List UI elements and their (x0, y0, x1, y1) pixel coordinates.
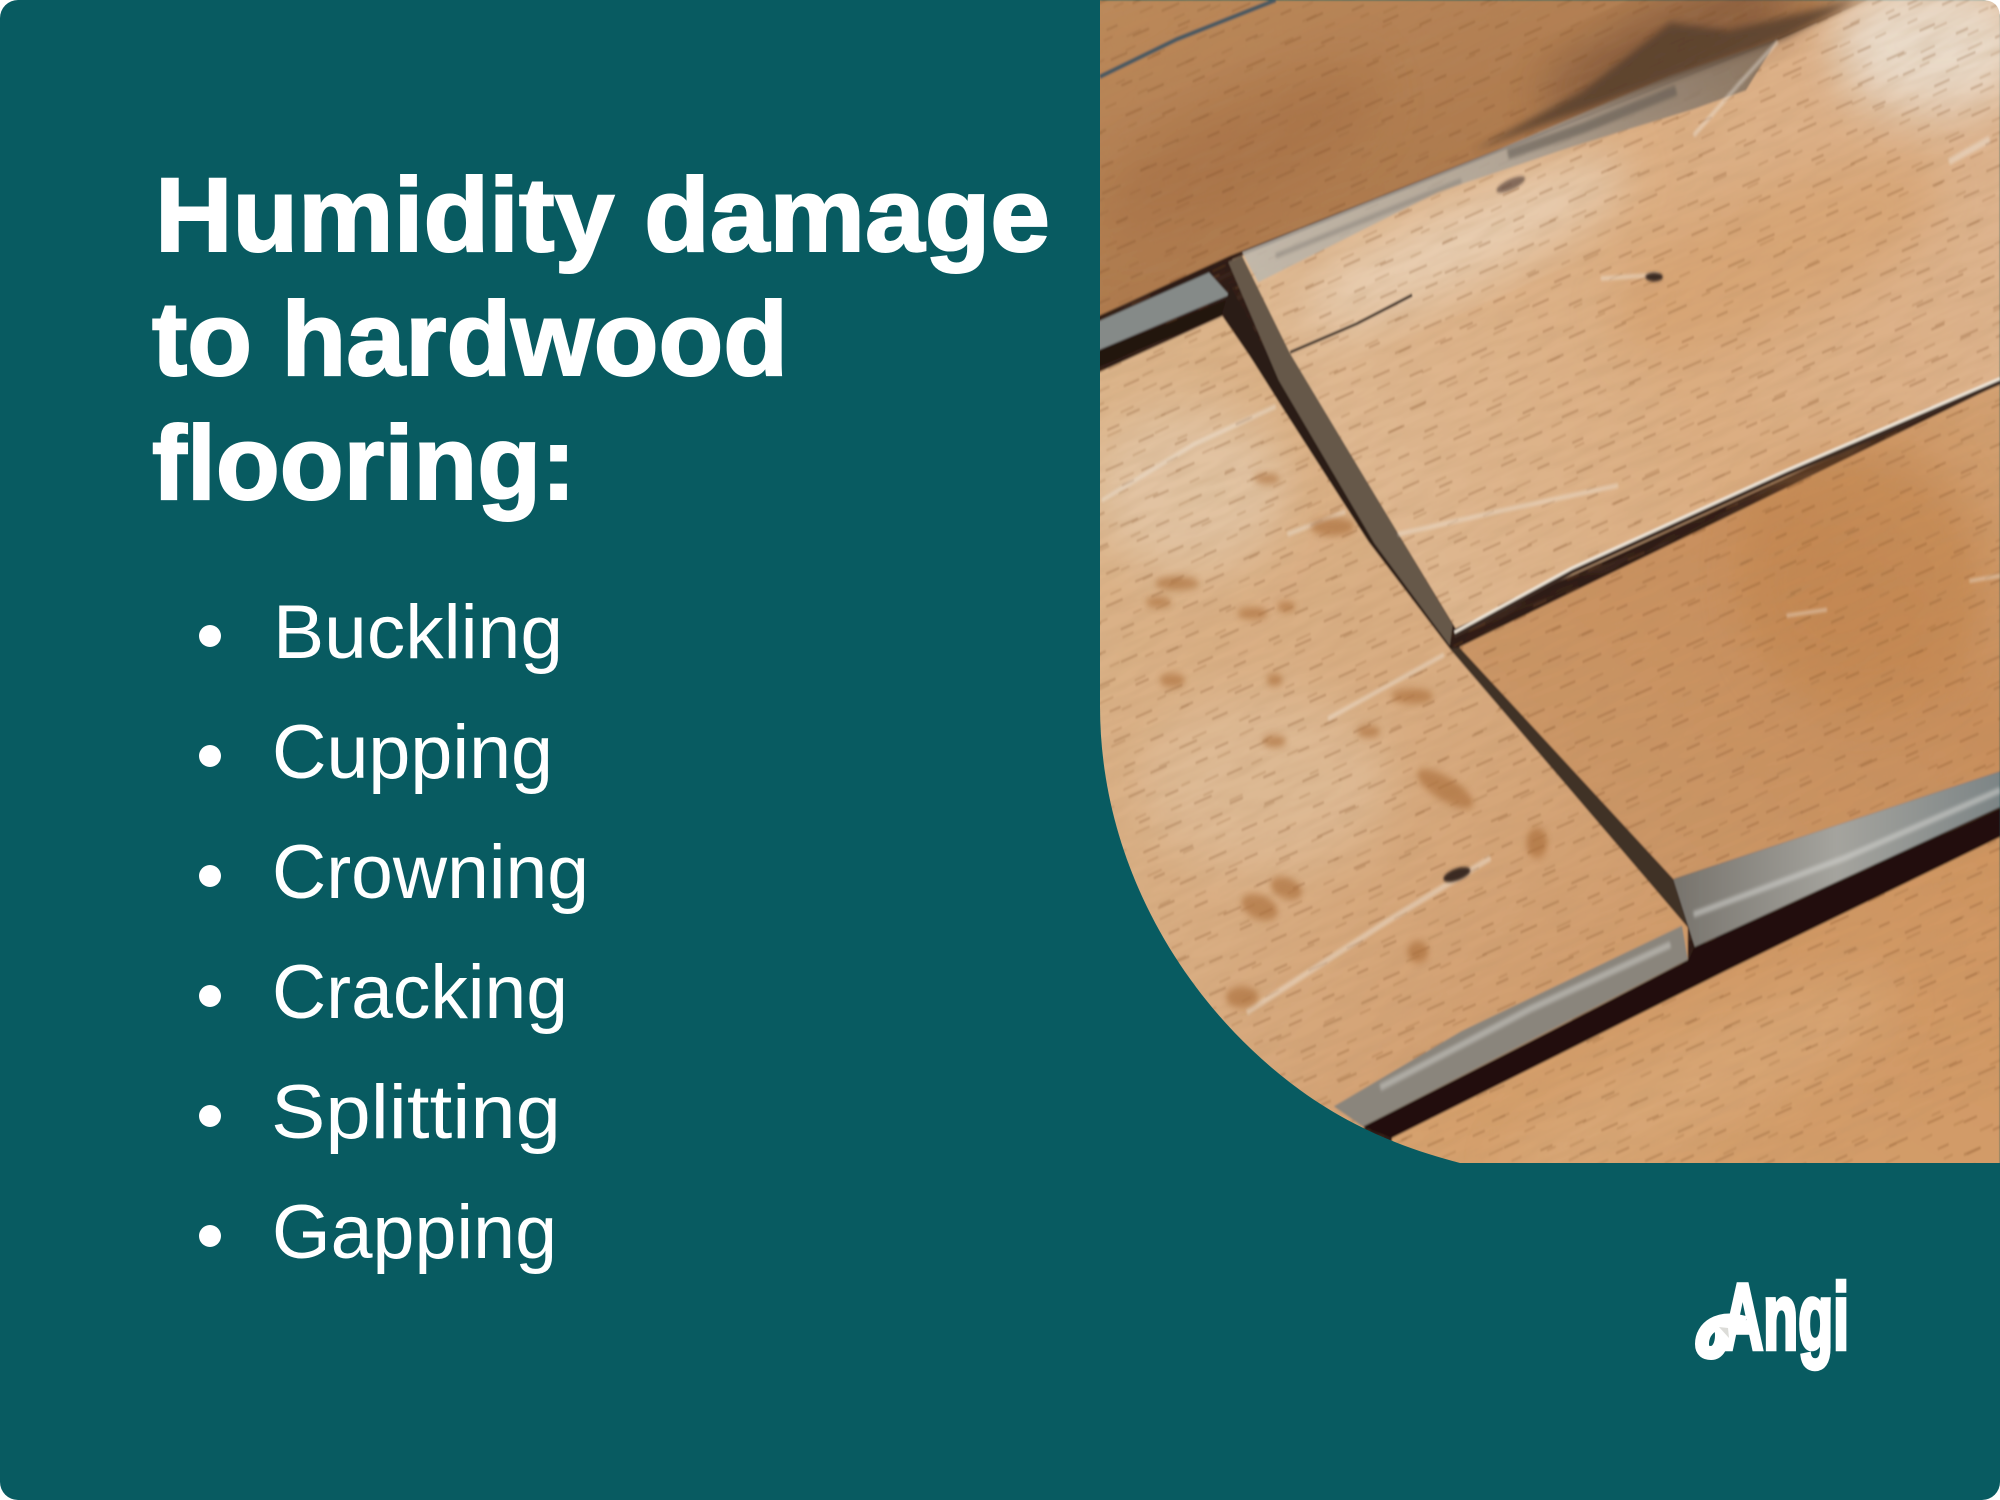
dark wear at top seam (1473, 0, 1856, 151)
plank: right middle board (1459, 384, 2000, 879)
list item: Cupping: Cupping (272, 710, 553, 795)
list item: Cracking: Cracking (272, 950, 568, 1035)
upper board worn edge (1242, 39, 1778, 282)
grey lifted strip right (1673, 771, 2000, 947)
dark knots (1442, 173, 1663, 885)
white scratches (1102, 41, 2000, 1012)
title: to hardwood (152, 281, 788, 398)
logo: Angi (1702, 1264, 1849, 1369)
top seam crack (1100, 0, 1276, 77)
title: flooring: (152, 405, 576, 522)
list of damage types (199, 590, 589, 1275)
plank: bottom right board (1392, 837, 2000, 1174)
base dark gap colour (1090, 0, 2000, 1174)
list item: Crowning: Crowning (272, 830, 589, 915)
list item: Buckling: Buckling (273, 590, 563, 675)
title (152, 157, 1050, 522)
plank: upper bright board (1232, 0, 2000, 628)
raised board end grain (1228, 256, 1453, 646)
plank crack line (1454, 382, 2000, 636)
stains on lower board (1146, 473, 1547, 1008)
plank: lower left board with stains (1090, 316, 1688, 1129)
plank: top brown board (1090, 0, 1868, 320)
left strip and gap (1090, 272, 1229, 354)
fibre texture (1105, 0, 2000, 1136)
lighting variation (1740, 452, 1984, 707)
wood grain (1090, 0, 2000, 1174)
photo: damaged hardwood floor planks (1100, 0, 2000, 1163)
black gap right (1363, 809, 2000, 1138)
title: Humidity damage (155, 157, 1050, 274)
list item: Splitting: Splitting (271, 1070, 561, 1155)
small crack upper board (1290, 295, 1412, 352)
lower-left dark seam (1222, 288, 1454, 650)
logo: Angi: Angi (1722, 1264, 1849, 1369)
grey strip lower (1334, 926, 1688, 1127)
list item: Gapping: Gapping (272, 1190, 557, 1275)
